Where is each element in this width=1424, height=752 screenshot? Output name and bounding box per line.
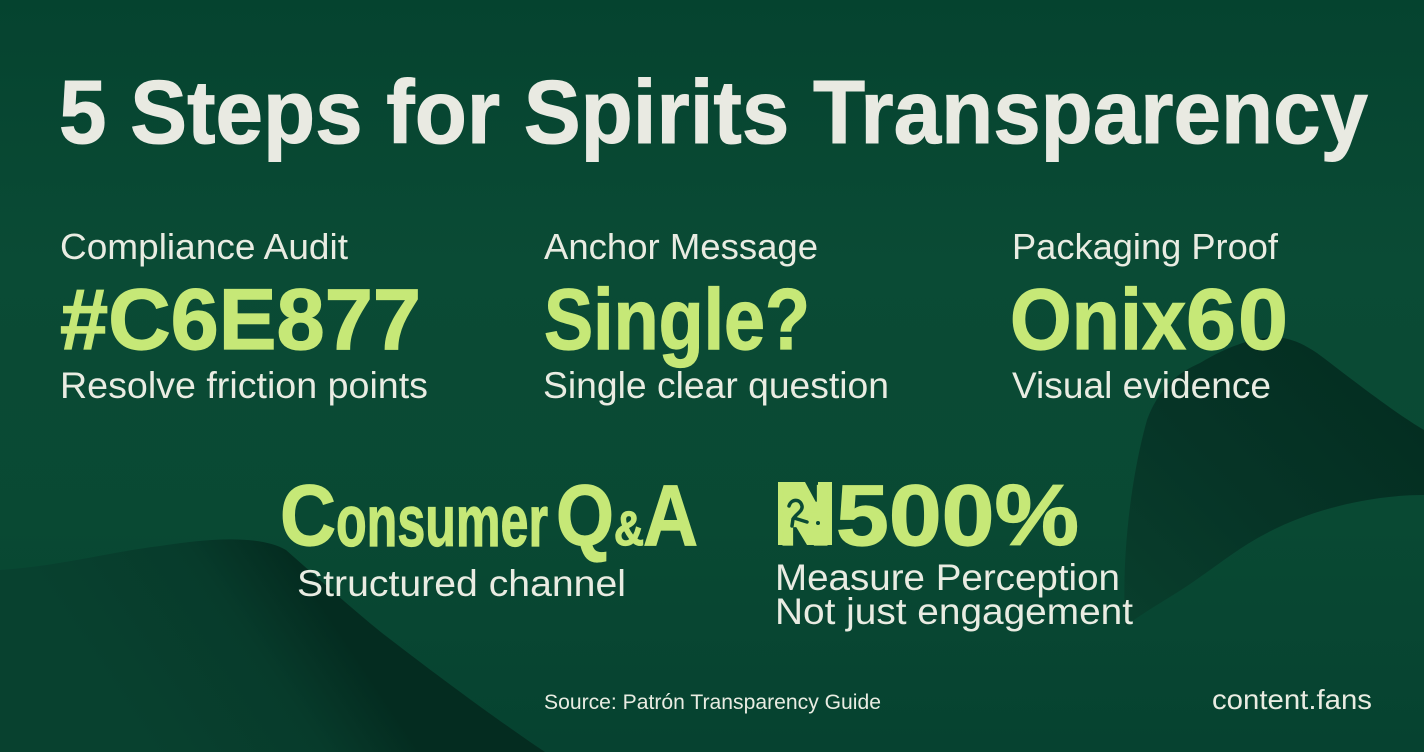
step 1 heading: Compliance Audit (60, 226, 348, 267)
step 4: consumer Q&A: A (643, 468, 698, 564)
step 3 heading: Packaging Proof (1012, 226, 1279, 267)
step 3: packaging proof (1010, 226, 1288, 406)
step 5 value: ₦ (778, 468, 832, 564)
step 1 value: #C6E877 (60, 272, 421, 368)
step 3 value: Onix (1010, 272, 1186, 368)
step 3: packaging proof: 6 (1186, 272, 1236, 368)
step 3 caption: Visual evidence (1012, 365, 1271, 406)
step 4: consumer Q&A: Q (556, 468, 614, 564)
brand credit: content.fans (1212, 684, 1372, 715)
step 2 caption: Single clear question (543, 365, 889, 406)
step 5: measure perception (775, 468, 1134, 632)
step 4: consumer Q&A: & (614, 503, 644, 556)
background hill: right (1124, 337, 1424, 626)
step 2: anchor message (543, 226, 889, 406)
step 2 value: Single? (544, 272, 810, 368)
step 4 value: C (280, 468, 336, 564)
step 5 value: 500% (836, 468, 1079, 564)
step 4 caption: Structured channel (297, 563, 626, 604)
step 1 caption: Resolve friction points (60, 365, 428, 406)
source note: Source: Patrón Transparency Guide (544, 691, 881, 714)
title: 5 Steps for Spirits Transparency (59, 63, 1368, 163)
step 2 heading: Anchor Message (544, 226, 818, 267)
step 4: consumer Q&A (280, 468, 698, 604)
step 5 caption: Measure Perception (775, 557, 1120, 598)
step 1: compliance audit (60, 226, 428, 406)
step 5: measure perception: Not just engagement (775, 591, 1134, 632)
step 4: consumer Q&A: onsumer (336, 482, 548, 562)
step 3: packaging proof: 0 (1238, 272, 1288, 368)
background hill: lower left (0, 539, 545, 752)
